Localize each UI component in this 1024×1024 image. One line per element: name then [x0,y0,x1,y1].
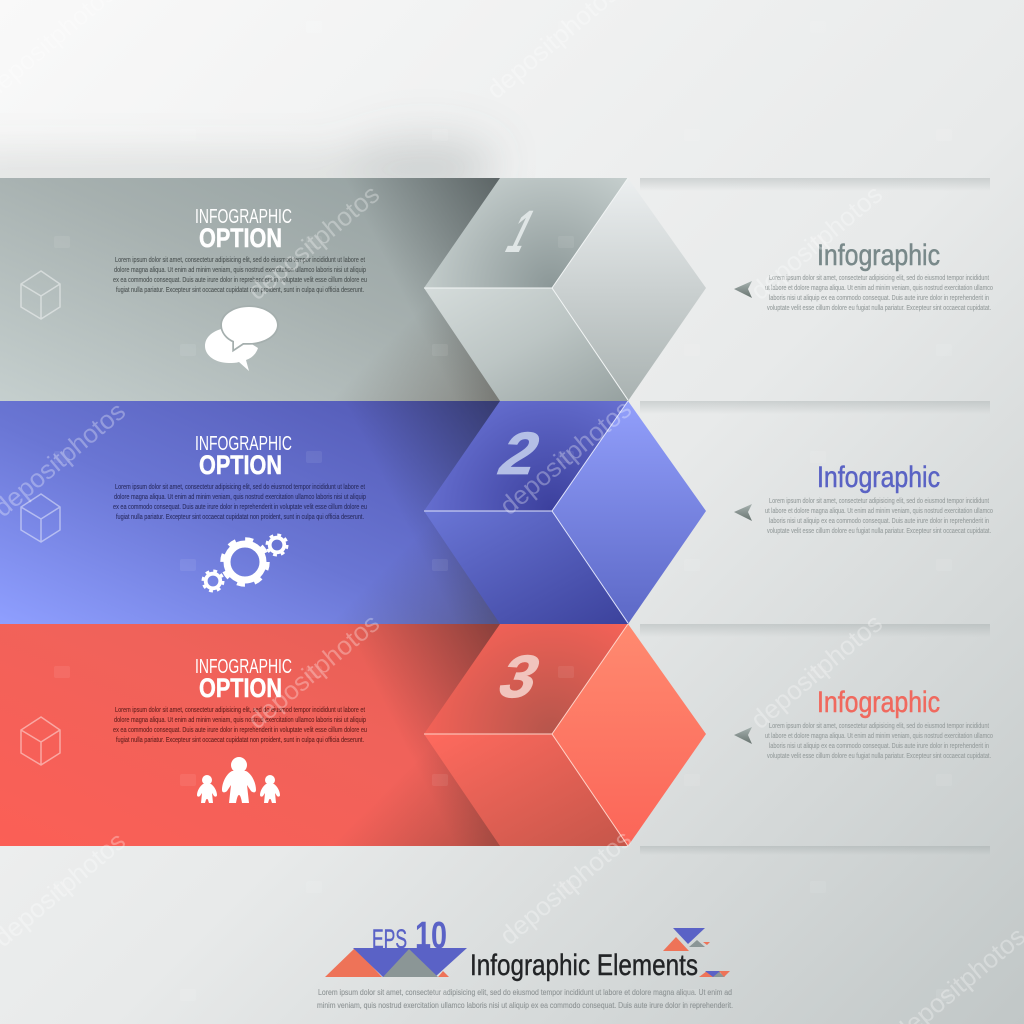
icon: gears [203,535,287,591]
watermarks: depositphotos [242,179,385,306]
watermarks: depositphotos [745,608,888,735]
text block 2: dolore magna aliqua. Ut enim ad minim veniam, quis nostrud exercitation ullamco laboris nisi ut aliquip [114,494,366,501]
text block 2 [113,484,367,521]
footer logo: triangles [325,948,467,977]
footer text: minim veniam, quis nostrud exercitation ullamco laboris nisi ut aliquip ex ea commodo consequat. Duis aute irure dolor in reprehenderit. [317,1001,733,1010]
heading: infographic option 1: INFOGRAPHIC [195,206,292,228]
cube 2 [424,401,706,624]
panel: band 1 gray [0,178,510,401]
icon: family [197,757,280,803]
watermarks: depositphotos [242,608,385,735]
right heading 2: Infographic [817,461,940,494]
icon: cube 2 [21,494,60,542]
footer decorative triangles [663,928,730,977]
right block 1 [734,239,993,312]
icon: cube 3 [21,717,60,765]
text block 1: dolore magna aliqua. Ut enim ad minim veniam, quis nostrud exercitation ullamco laboris nisi ut aliquip [114,267,366,274]
arrow 2 [734,504,752,521]
text block 1 [113,257,367,294]
right text 1 [765,275,993,312]
text block 1: fugiat nulla pariatur. Excepteur sint occaecat cupidatat non proident, sunt in culpa qui officia deserunt. [116,287,364,294]
number 2: 2 [490,421,549,487]
text block 3: ex ea commodo consequat. Duis aute irure dolor in reprehenderit in voluptate velit esse cillum dolore eu [113,727,367,734]
number 3: 3 [490,644,549,710]
text block 2: Lorem ipsum dolor sit amet, consectetur adipisicing elit, sed do eiusmod tempor incididunt ut labore et [115,484,365,491]
panel: band 3 red [0,624,510,846]
icon: cube 1 [21,271,60,319]
text block 3: dolore magna aliqua. Ut enim ad minim veniam, quis nostrud exercitation ullamco laboris nisi ut aliquip [114,717,366,724]
arrow 1 [734,281,752,298]
text block 2: fugiat nulla pariatur. Excepteur sint occaecat cupidatat non proident, sunt in culpa qui officia deserunt. [116,514,364,521]
footer text [317,988,733,1010]
right block 3 [734,686,993,760]
right heading 1: Infographic [817,239,940,272]
watermarks: depositphotos [494,824,637,951]
number 1: 1 [497,197,545,265]
watermarks: depositphotos [494,394,637,521]
panel: band 2 blue [0,401,510,624]
right block 2 [734,461,993,535]
label: EPS 10: EPS [372,924,407,954]
text block 3: fugiat nulla pariatur. Excepteur sint occaecat cupidatat non proident, sunt in culpa qui officia deserunt. [116,737,364,744]
arrow 3 [734,727,752,744]
cube 1 [424,178,706,401]
text block 3 [113,707,367,744]
text block 1: Lorem ipsum dolor sit amet, consectetur adipisicing elit, sed do eiusmod tempor incididunt ut labore et [115,257,365,264]
heading: infographic option 3: OPTION [199,673,282,703]
right heading 3: Infographic [817,686,940,719]
icon: speech bubbles [205,307,277,371]
heading: infographic option 2: INFOGRAPHIC [195,433,292,455]
label: EPS 10: 10 [415,915,447,957]
heading: infographic option 3 [195,656,292,703]
text block 1: ex ea commodo consequat. Duis aute irure dolor in reprehenderit in voluptate velit esse cillum dolore eu [113,277,367,284]
text block 3: Lorem ipsum dolor sit amet, consectetur adipisicing elit, sed do eiusmod tempor incididunt ut labore et [115,707,365,714]
heading: infographic option 1 [195,206,292,253]
right panel shadows [640,178,990,855]
text block 2: ex ea commodo consequat. Duis aute irure dolor in reprehenderit in voluptate velit esse cillum dolore eu [113,504,367,511]
heading: infographic option 2: OPTION [199,450,282,480]
right text 2 [765,498,993,535]
footer text: Lorem ipsum dolor sit amet, consectetur adipisicing elit, sed do eiusmod tempor incididunt ut labore et dolore magna aliqua. Ut enim ad [318,988,732,997]
cube 3 [424,624,706,846]
heading: infographic option 1: OPTION [199,223,282,253]
heading: infographic option 2 [195,433,292,480]
right text 3 [765,723,993,760]
label: EPS 10 [372,915,447,957]
heading: infographic option 3: INFOGRAPHIC [195,656,292,678]
footer title: Infographic Elements [470,949,698,982]
watermarks: depositphotos [745,179,888,306]
soft shadow above bands [0,132,500,190]
